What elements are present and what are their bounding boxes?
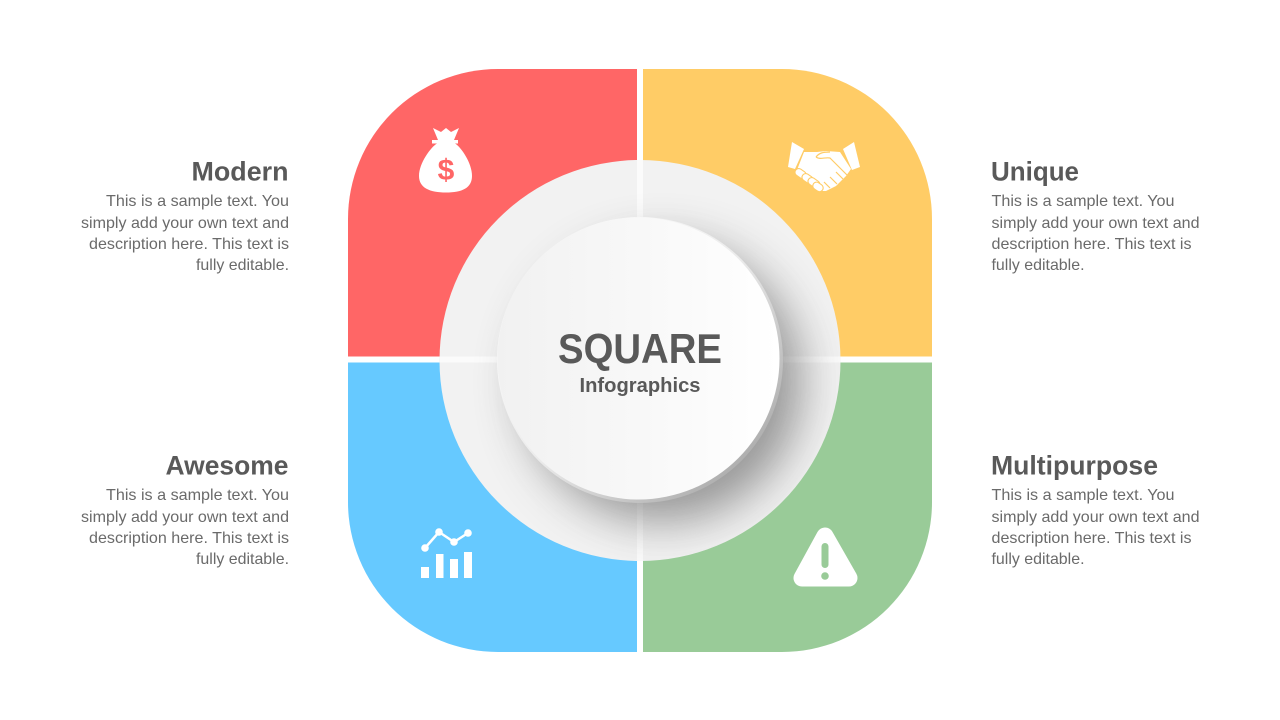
text block: Awesome — [81, 450, 289, 568]
text block: Multipurpose — [991, 450, 1200, 568]
text block: Awesome: Awesome — [166, 450, 288, 480]
text block: Modern: fully editable. — [196, 257, 289, 274]
text block: Multipurpose: description here. This text is — [992, 530, 1192, 547]
center title: Infographics — [580, 375, 700, 397]
text block: Multipurpose: Multipurpose — [991, 450, 1158, 480]
panel: green quadrant — [643, 362, 932, 652]
text block: Modern: Modern — [192, 156, 288, 186]
text block: Modern: simply add your own text and — [81, 215, 289, 232]
center disc — [440, 160, 841, 561]
text block: Awesome: This is a sample text. You — [106, 487, 289, 504]
text block: Unique: This is a sample text. You — [992, 193, 1174, 210]
center title — [558, 325, 722, 397]
icon: money bag — [419, 128, 472, 192]
text block: Awesome: simply add your own text and — [81, 509, 289, 526]
text block: Multipurpose: simply add your own text and — [992, 509, 1200, 526]
text block: Unique — [991, 156, 1200, 274]
text block: Multipurpose: fully editable. — [992, 551, 1084, 568]
icon: bar and line chart — [421, 528, 472, 578]
icon: handshake — [788, 142, 860, 193]
text block: Unique: Unique — [991, 156, 1079, 186]
text block: Modern — [81, 156, 289, 274]
text block: Awesome: fully editable. — [196, 551, 289, 568]
icon: warning triangle — [802, 536, 849, 580]
panel: blue quadrant — [348, 362, 637, 652]
text block: Unique: description here. This text is — [992, 236, 1192, 253]
text block: Awesome: description here. This text is — [89, 530, 289, 547]
text block: Multipurpose: This is a sample text. You — [992, 487, 1174, 504]
text block: Modern: This is a sample text. You — [106, 193, 289, 210]
text block: Unique: fully editable. — [992, 257, 1084, 274]
panel: yellow quadrant — [643, 69, 932, 356]
text block: Unique: simply add your own text and — [992, 215, 1200, 232]
center title: SQUARE — [558, 325, 722, 372]
icon: money bag: $ — [438, 154, 455, 187]
text block: Modern: description here. This text is — [89, 236, 289, 253]
panel: red quadrant — [348, 69, 637, 356]
